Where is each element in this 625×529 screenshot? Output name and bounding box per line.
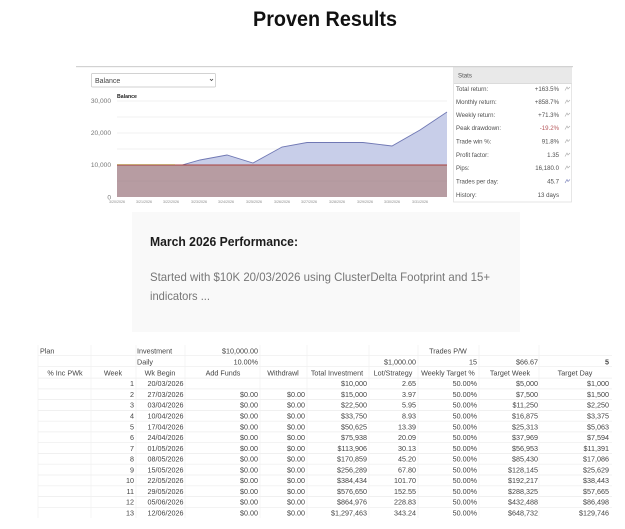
table rows: $0.00 [287,401,305,410]
table rows: $384,434 [337,476,367,485]
chart title: Balance [117,94,137,100]
x axis date labels: 3/26/2026 [274,200,290,204]
table rows: $0.00 [287,390,305,399]
plan summary rows [40,347,609,367]
table header [47,368,593,378]
table rows: 50.00% [453,433,478,442]
plan summary rows: $66.67 [516,358,538,367]
stats panel: 13 days [538,192,559,199]
table rows: $50,625 [341,422,367,431]
table rows: 15/05/2026 [148,465,184,474]
table rows: 50.00% [453,412,478,420]
panel body text: Started with $10K 20/03/2026 using ClusterDelta Footprint and 15+ [150,270,490,284]
plan summary rows: $10,000.00 [222,347,258,356]
table rows: 08/05/2026 [148,455,184,464]
table header: % Inc PWk [47,368,83,378]
panel body text [150,270,490,303]
table rows: $57,665 [583,487,609,496]
stats panel: +71.3% [538,112,560,119]
table rows: $7,500 [516,390,538,399]
table rows: $11,391 [584,444,609,453]
panel: balance chart screenshot [76,66,573,204]
y axis labels [91,98,111,202]
title: Proven Results [253,8,397,31]
table rows: $37,969 [512,433,538,442]
table rows: 7 [130,444,134,453]
panel body text: indicators ... [150,289,210,303]
plan summary rows: Daily [137,358,153,367]
plan summary rows: Plan [40,347,54,356]
table rows: $864,976 [337,498,367,507]
table rows: 30.13 [398,444,416,453]
table rows: 8 [130,455,134,464]
x axis date labels: 3/24/2026 [218,200,234,204]
table rows: $0.00 [240,422,258,431]
table rows: 1 [130,379,134,388]
table rows: $0.00 [240,455,258,464]
table rows: 05/06/2026 [148,498,184,507]
table rows: $0.00 [240,487,258,496]
table rows: $128,145 [508,465,538,474]
stats panel: Weekly return: [456,112,495,119]
table rows: 6 [130,433,134,442]
table rows: $11,250 [513,401,538,410]
table rows: $288,325 [508,487,538,496]
stats panel: Peak drawdown: [456,125,501,132]
table rows: $0.00 [287,487,305,496]
table header: Add Funds [206,368,241,378]
table rows: $0.00 [240,390,258,399]
table rows: 3 [130,401,134,410]
table rows: 101.70 [394,476,416,485]
stats panel: Total return: [456,86,488,93]
table header: Withdrawl [267,368,299,378]
table rows: 12/06/2026 [148,508,184,517]
table rows: 17/04/2026 [148,422,184,431]
x axis date labels: 3/20/2026 [109,200,125,204]
table rows: 24/04/2026 [148,433,184,442]
table rows: 152.55 [394,487,416,496]
table rows: 50.00% [453,455,478,464]
balance dropdown [92,74,216,87]
table rows: $17,086 [583,455,609,464]
table rows: 3.97 [402,390,416,399]
table rows: 67.80 [398,465,416,474]
table rows: $0.00 [287,444,305,453]
table rows: $0.00 [287,433,305,442]
table rows: 45.20 [398,455,416,464]
table rows: $648,732 [508,508,538,517]
x axis date labels: 3/28/2026 [329,200,345,204]
table rows: 50.00% [453,465,478,474]
table rows: 13.39 [398,422,416,431]
table rows: $0.00 [240,412,258,420]
table rows: $1,000 [587,379,609,388]
stats panel: Stats [458,72,472,80]
balance dropdown: Balance [95,78,120,85]
table rows: 228.83 [394,498,416,507]
x axis date labels: 3/25/2026 [246,200,262,204]
x axis date labels: 3/30/2026 [384,200,400,204]
table rows: $2,250 [587,401,609,410]
stats panel: Profit factor: [456,152,489,159]
table header: Target Week [490,368,531,378]
panel heading: March 2026 Performance: [150,234,298,249]
stats panel: 91.8% [542,138,560,146]
plan summary rows: 10.00% [234,358,259,367]
table rows: $0.00 [240,433,258,442]
x axis date labels: 3/21/2026 [136,200,152,204]
table rows: $129,746 [579,508,609,517]
table rows: 2 [130,390,134,399]
stats panel: 16,180.0 [535,165,560,172]
x axis date labels: 3/23/2026 [191,200,207,204]
y axis labels: 0 [107,194,111,202]
stats panel: 1.35 [547,152,560,159]
table rows: 8.93 [402,412,416,420]
panel: March 2026 performance [132,212,520,332]
table header: Weekly Target % [421,368,475,378]
x axis date labels: 3/27/2026 [301,200,317,204]
projection table [38,345,612,518]
table rows: $85,430 [512,455,538,464]
table rows: $0.00 [240,476,258,485]
stats panel: 45.7 [547,178,560,186]
table header: Target Day [558,368,593,378]
stats panel: Trade win %: [456,138,492,146]
table rows: 22/05/2026 [148,476,184,485]
table rows: $1,297,463 [331,508,367,517]
plan summary rows: Investment [137,347,172,356]
table rows: $576,650 [337,487,367,496]
x axis date labels [109,200,428,204]
table rows: 50.00% [453,508,478,517]
table rows: 03/04/2026 [148,401,184,410]
table rows: 20/03/2026 [148,379,184,388]
table rows: $5,000 [516,379,538,388]
table rows: $0.00 [287,508,305,517]
table rows: $33,750 [341,412,367,420]
table rows: $10,000 [341,379,367,388]
y axis labels: 10,000 [91,162,111,169]
table rows: 5 [130,422,134,431]
table rows: $192,217 [508,476,538,485]
table rows: 4 [130,412,134,420]
table rows: 50.00% [453,498,478,507]
table header: Lot/Strategy [374,368,413,378]
table rows: 50.00% [453,476,478,485]
stats panel: +163.5% [535,86,560,93]
table rows: 50.00% [453,379,478,388]
table rows: $0.00 [240,444,258,453]
table rows: $113,906 [338,444,367,453]
table rows: 12 [126,498,134,507]
table rows: 11 [127,487,134,496]
table rows: $0.00 [287,422,305,431]
table rows: 50.00% [453,422,478,431]
plan summary rows: Trades P/W [429,347,467,356]
table rows: 20.09 [398,433,416,442]
y axis labels: 30,000 [91,98,111,105]
table rows: $86,498 [583,498,609,507]
table rows: $0.00 [240,508,258,517]
stats panel: Trades per day: [456,178,499,186]
table rows: 50.00% [453,390,478,399]
table rows: $15,000 [341,390,367,399]
stats panel: Pips: [456,165,470,172]
table rows: $3,375 [587,412,609,420]
stats panel: History: [456,192,477,199]
table rows: $0.00 [287,455,305,464]
y axis labels: 20,000 [91,130,111,137]
table rows: $0.00 [287,412,305,420]
stats panel [454,68,572,202]
stat chart icons [565,87,570,170]
table rows: 10 [126,476,134,485]
table rows: $0.00 [240,498,258,507]
table rows: $0.00 [287,498,305,507]
table rows: 29/05/2026 [148,487,184,496]
table rows: $256,289 [337,465,367,474]
table rows: 01/05/2026 [148,444,184,453]
x axis date labels: 3/31/2026 [412,200,428,204]
table rows: $16,875 [512,412,538,420]
table rows: $7,594 [587,433,609,442]
x axis date labels: 3/29/2026 [357,200,373,204]
table rows: $170,859 [337,455,367,464]
stats panel: Monthly return: [456,99,497,106]
balance area series [117,112,447,197]
table rows: 343.24 [394,508,416,517]
table rows: $22,500 [341,401,367,410]
table rows: $56,953 [512,444,538,453]
table rows: $1,500 [587,390,609,399]
table header: Total Investment [311,368,363,378]
table header: Wk Begin [145,368,175,378]
plan summary rows: 5 [605,358,609,367]
table rows: $25,629 [583,465,609,474]
table rows: 2.65 [402,379,416,388]
table rows: $0.00 [240,401,258,410]
table rows: $75,938 [341,433,367,442]
table rows: $0.00 [287,476,305,485]
table header: Week [104,368,123,378]
table rows: 50.00% [453,401,478,410]
table rows: $5,063 [587,422,609,431]
x axis date labels: 3/22/2026 [163,200,179,204]
stats panel: -19.2% [540,125,560,132]
table rows [126,379,609,517]
table rows: 50.00% [453,444,478,453]
table rows: 27/03/2026 [148,390,184,399]
table rows: 13 [126,508,134,517]
table rows: $0.00 [287,465,305,474]
table rows: $38,443 [583,476,609,485]
table rows: $25,313 [512,422,538,431]
table rows: 9 [130,465,134,474]
table rows: 5.95 [402,401,416,410]
plan summary rows: 15 [469,358,477,367]
table rows: 10/04/2026 [148,412,184,420]
equity red area series [117,165,447,197]
table rows: $432,488 [508,498,538,507]
table rows: 50.00% [453,487,478,496]
plan summary rows: $1,000.00 [384,358,416,367]
table rows: $0.00 [240,465,258,474]
stats panel: +858.7% [535,99,560,106]
